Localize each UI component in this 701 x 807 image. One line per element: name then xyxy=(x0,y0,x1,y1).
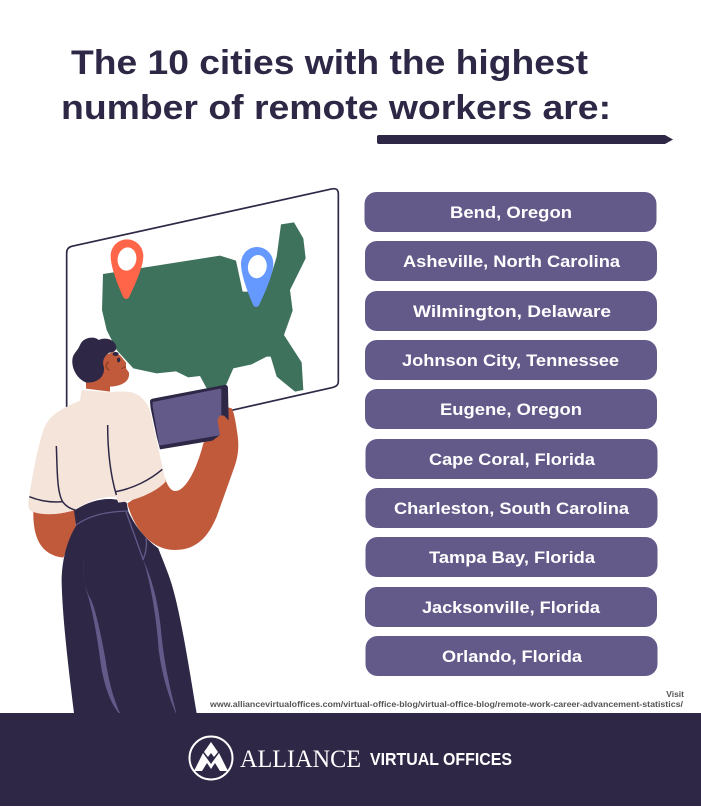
left arm xyxy=(33,508,76,558)
screen frame xyxy=(67,189,338,413)
trouser details xyxy=(76,511,146,560)
city: Bend, Oregon: Bend, Oregon xyxy=(450,203,572,222)
city: Cape Coral, Florida xyxy=(366,439,658,479)
city: Jacksonville, Florida: Jacksonville, Florida xyxy=(422,598,601,617)
location pin: blue xyxy=(241,247,273,307)
trousers xyxy=(62,499,197,713)
city: Johnson City, Tennessee xyxy=(365,340,657,380)
city: Orlando, Florida: Orlando, Florida xyxy=(442,647,583,666)
city: Charleston, South Carolina xyxy=(366,488,658,528)
city: Asheville, North Carolina: Asheville, North Carolina xyxy=(403,252,621,271)
neck and face xyxy=(86,352,129,392)
city: Charleston, South Carolina: Charleston, South Carolina xyxy=(394,499,630,518)
ear xyxy=(106,362,109,370)
mouth xyxy=(121,367,126,369)
right arm xyxy=(127,407,238,550)
logo emblem xyxy=(190,736,232,780)
title: number of remote workers are: xyxy=(61,89,611,127)
shirt seams xyxy=(29,425,162,510)
footer band xyxy=(0,713,701,806)
illustration: person with tablet xyxy=(28,385,238,717)
title xyxy=(61,44,611,127)
hand fingers xyxy=(207,415,230,445)
city: Johnson City, Tennessee: Johnson City, Tennessee xyxy=(402,351,619,370)
tablet xyxy=(150,385,229,449)
city: Eugene, Oregon xyxy=(365,389,657,429)
source note: Visit xyxy=(666,689,684,699)
city: Orlando, Florida xyxy=(366,636,658,676)
city: Tampa Bay, Florida: Tampa Bay, Florida xyxy=(429,548,596,567)
location pin: orange xyxy=(111,239,143,299)
city: Tampa Bay, Florida xyxy=(366,537,658,577)
source note: www.alliancevirtualoffices.com/virtual-office-blog/virtual-office-blog/remote-work-career-advancement-statistics/ xyxy=(209,699,684,709)
list of cities xyxy=(364,192,658,676)
footer logo: VIRTUAL OFFICES xyxy=(370,749,512,769)
illustration: map panel xyxy=(67,189,338,413)
title: The 10 cities with the highest xyxy=(71,44,588,82)
city: Eugene, Oregon: Eugene, Oregon xyxy=(440,400,582,419)
city: Bend, Oregon xyxy=(364,192,656,232)
person head xyxy=(72,338,129,392)
city: Cape Coral, Florida: Cape Coral, Florida xyxy=(429,450,596,469)
shirt xyxy=(28,390,166,514)
map of the USA xyxy=(102,222,306,392)
glasses and eye xyxy=(113,352,119,356)
city: Asheville, North Carolina xyxy=(365,241,657,281)
title underline arrow xyxy=(377,135,673,144)
city: Jacksonville, Florida xyxy=(365,587,657,627)
hair xyxy=(72,338,116,383)
source note xyxy=(209,689,684,709)
city: Wilmington, Delaware: Wilmington, Delaware xyxy=(413,302,611,321)
footer logo xyxy=(190,736,512,780)
city: Wilmington, Delaware xyxy=(365,291,657,331)
logo wordmark: ALLIANCE xyxy=(240,746,361,773)
